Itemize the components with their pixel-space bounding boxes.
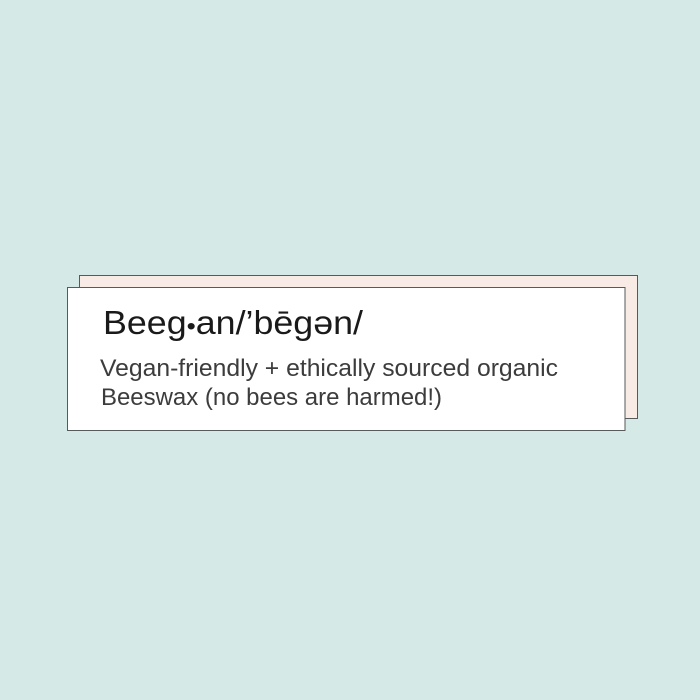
back card: peach offset panel bbox=[80, 276, 638, 418]
definition line 1: Vegan-friendly + ethically sourced organic bbox=[100, 355, 558, 382]
definition text bbox=[100, 355, 558, 411]
heading: dictionary term and pronunciation: Beeg •an/’bēgən/ bbox=[103, 304, 364, 341]
definition line 2: Beeswax (no bees are harmed!) bbox=[101, 384, 442, 411]
front card background bbox=[68, 288, 625, 430]
front card: definition panel bbox=[68, 288, 625, 430]
